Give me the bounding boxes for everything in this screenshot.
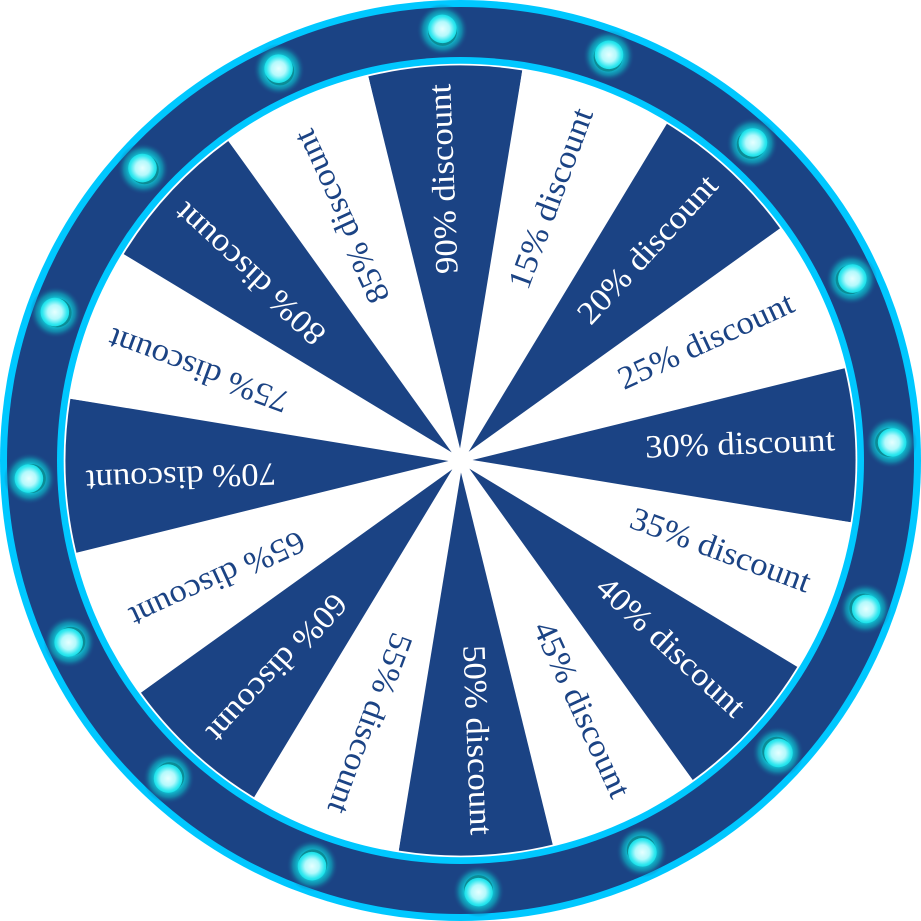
segment: 45% discount: 45% discount: [525, 616, 638, 804]
segment: 25% discount: [439, 225, 851, 525]
icon: light 13: [3, 451, 57, 506]
icon: light 15: [107, 132, 180, 206]
icon: light 3: [715, 107, 789, 180]
segment: 65% discount: [70, 396, 482, 696]
icon: light 1: [415, 3, 470, 57]
segment: 40% discount: [417, 412, 803, 785]
icon: light 16: [245, 35, 314, 104]
segment: 70% discount: 70% discount: [85, 455, 277, 499]
icon: light 11: [132, 741, 206, 814]
icon: light 8: [607, 817, 676, 886]
wheel segments: [63, 63, 858, 858]
segment: 50% discount: [384, 469, 553, 858]
icon: light 12: [35, 607, 104, 676]
icon: light 9: [451, 864, 506, 918]
segment: 35% discount: [445, 392, 858, 670]
segment: 35% discount: 35% discount: [625, 501, 816, 600]
icon: light 6: [832, 575, 899, 642]
segment: 80% discount: [118, 136, 504, 509]
icon: light 14: [22, 279, 89, 346]
icon: light 5: [864, 415, 918, 470]
segment: 55% discount: [251, 445, 529, 858]
icon: light 7: [741, 715, 814, 789]
segment: 40% discount: 40% discount: [589, 570, 753, 725]
segment: 90% discount: [368, 63, 537, 452]
segment: 20% discount: 20% discount: [570, 168, 726, 332]
segment: 70% discount: [63, 384, 452, 553]
segment: 45% discount: [396, 439, 696, 851]
icon: light 4: [817, 245, 886, 314]
segment: 20% discount: [412, 118, 785, 504]
segment: 75% discount: 75% discount: [103, 320, 294, 420]
icon: light 10: [279, 832, 346, 899]
segment: 30% discount: 30% discount: [644, 422, 836, 466]
segment: 30% discount: [469, 368, 858, 537]
segment: 60% discount: 60% discount: [199, 586, 354, 750]
segment: 25% discount: 25% discount: [612, 285, 800, 397]
segment: 15% discount: 15% discount: [501, 103, 601, 294]
segment: 80% discount: 80% discount: [167, 195, 333, 352]
segment: 85% discount: [225, 70, 525, 482]
segment: 85% discount: 85% discount: [286, 124, 397, 309]
segment: 90% discount: 90% discount: [422, 83, 466, 275]
segment: 60% discount: [136, 417, 509, 803]
segment: 15% discount: [392, 63, 670, 476]
segment: 55% discount: 55% discount: [320, 628, 419, 819]
segment: 50% discount: 50% discount: [455, 644, 499, 836]
segment: 65% discount: 65% discount: [124, 523, 311, 635]
segment: 75% discount: [63, 251, 476, 529]
icon: light 2: [575, 22, 642, 89]
